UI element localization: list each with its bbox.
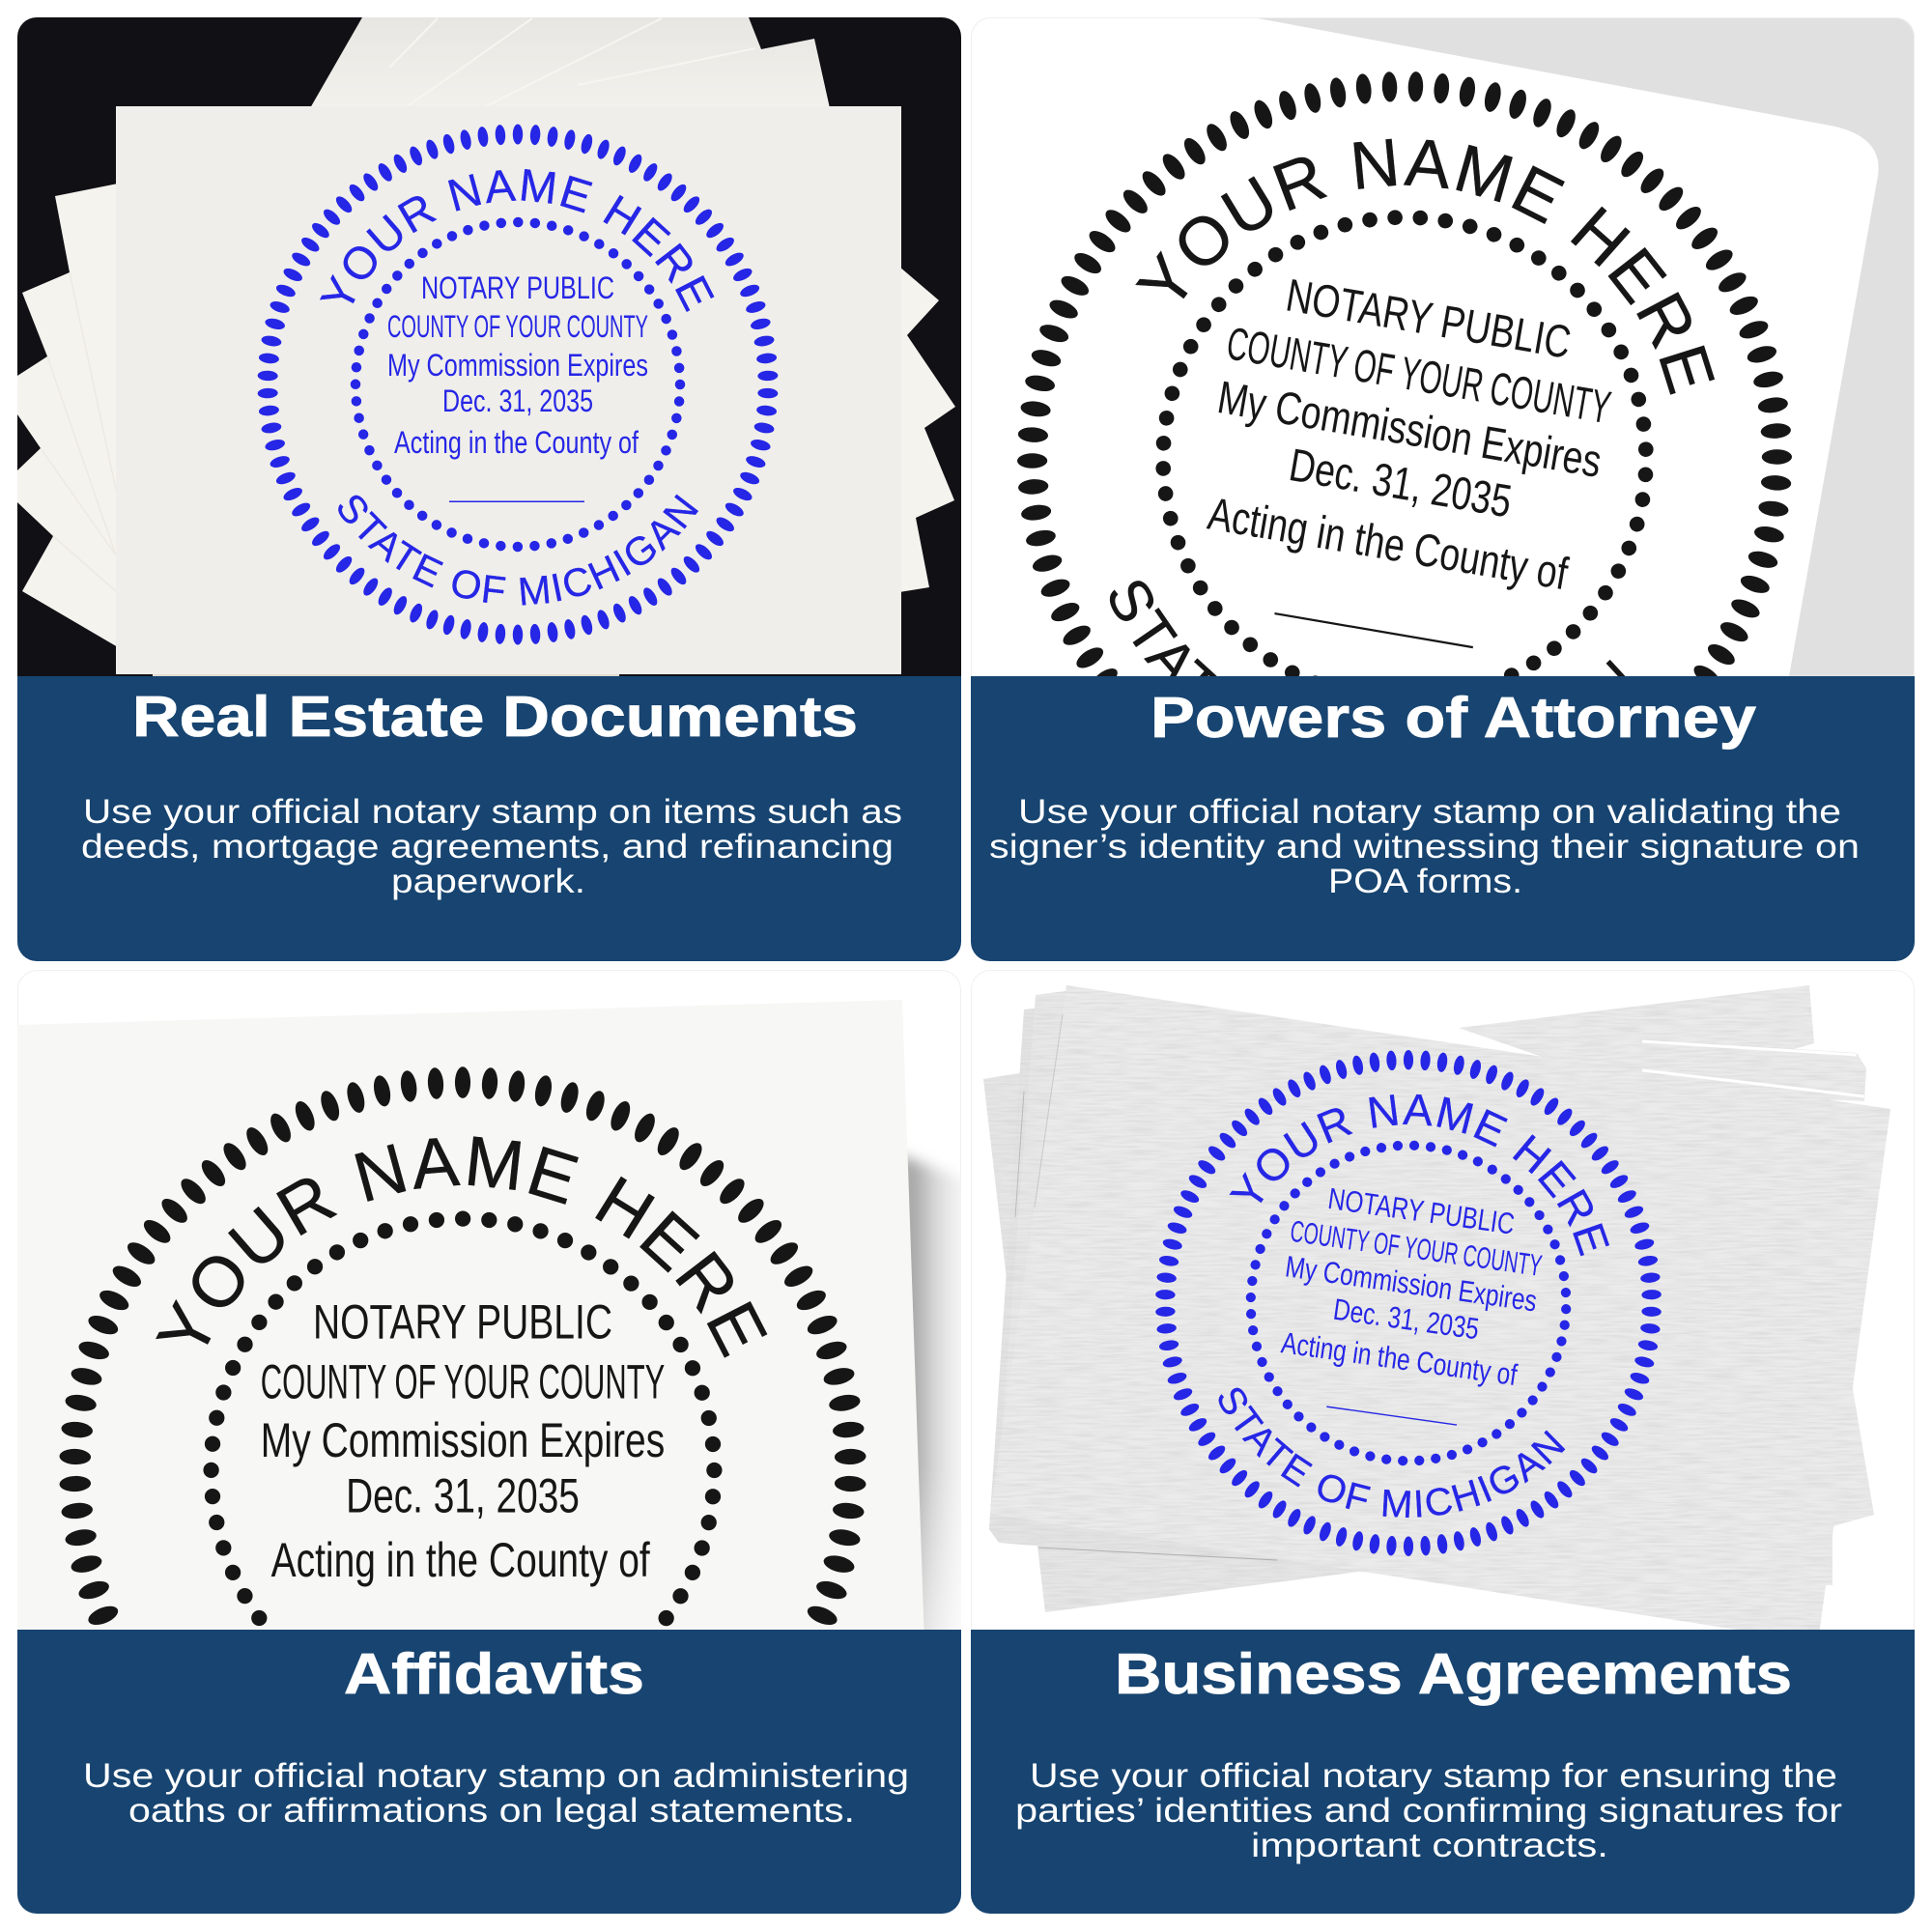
black notary stamp: YOUR NAME HERE bbox=[1135, 139, 1716, 395]
photo background: dark surface bbox=[17, 17, 961, 694]
blue notary stamp: Acting in the County of bbox=[1279, 1325, 1520, 1392]
blue notary stamp bbox=[1155, 1050, 1662, 1556]
description: parties’ identities and confirming signatures for bbox=[1015, 1792, 1842, 1830]
blue notary stamp: COUNTY OF YOUR COUNTY bbox=[1289, 1214, 1544, 1283]
description: important contracts. bbox=[1251, 1827, 1608, 1864]
black notary stamp bbox=[60, 1066, 866, 1627]
description bbox=[1015, 1757, 1842, 1864]
description: oaths or affirmations on legal statements. bbox=[128, 1792, 855, 1830]
black notary stamp bbox=[1017, 71, 1792, 676]
blue notary stamp: STATE OF MICHIGAN bbox=[338, 495, 698, 606]
fanned papers bbox=[17, 17, 955, 678]
description: paperwork. bbox=[391, 863, 585, 900]
description: Use your official notary stamp on items such as bbox=[83, 793, 902, 831]
heading: Business Agreements bbox=[1115, 1642, 1792, 1706]
black notary stamp: NOTARY PUBLIC bbox=[313, 1295, 612, 1350]
description bbox=[990, 798, 1857, 893]
blue notary stamp: YOUR NAME HERE bbox=[1229, 1094, 1609, 1256]
blue notary stamp: My Commission Expires bbox=[387, 348, 648, 383]
blue notary stamp: NOTARY PUBLIC bbox=[421, 270, 614, 305]
blue notary stamp: STATE OF MICHIGAN bbox=[1219, 1387, 1565, 1519]
description: Use your official notary stamp on administering bbox=[83, 1757, 909, 1795]
paper shadow bbox=[908, 1150, 961, 1630]
stacked textured papers bbox=[983, 985, 1890, 1642]
blue notary stamp: NOTARY PUBLIC bbox=[1326, 1181, 1517, 1241]
black notary stamp: Acting in the County of bbox=[271, 1533, 650, 1587]
panel: affidavits bbox=[17, 970, 961, 1914]
black notary stamp: My Commission Expires bbox=[1214, 372, 1605, 488]
photo background: white bbox=[971, 970, 1915, 1646]
panel: powers of attorney bbox=[971, 17, 1915, 961]
white paper card bbox=[971, 17, 1879, 676]
caption band bbox=[971, 1630, 1915, 1914]
paper sheet bbox=[17, 1000, 924, 1642]
heading: Real Estate Documents bbox=[132, 685, 858, 749]
caption band bbox=[17, 1630, 961, 1914]
black notary stamp: NOTARY PUBLIC bbox=[1283, 270, 1575, 369]
blue notary stamp: My Commission Expires bbox=[1283, 1249, 1539, 1319]
blue notary stamp: COUNTY OF YOUR COUNTY bbox=[387, 309, 648, 344]
black notary stamp: COUNTY OF YOUR COUNTY bbox=[261, 1355, 665, 1409]
black notary stamp: Dec. 31, 2035 bbox=[1286, 440, 1515, 527]
description: Use your official notary stamp for ensuring the bbox=[1030, 1757, 1837, 1795]
description: deeds, mortgage agreements, and refinancing bbox=[81, 828, 894, 866]
blue notary stamp: Dec. 31, 2035 bbox=[1331, 1293, 1481, 1346]
photo background: white bbox=[17, 970, 961, 1646]
blue notary stamp: YOUR NAME HERE bbox=[320, 169, 715, 312]
black notary stamp: YOUR NAME HERE bbox=[156, 1136, 767, 1358]
panel: real estate documents bbox=[17, 17, 961, 961]
black notary stamp: Dec. 31, 2035 bbox=[346, 1468, 580, 1522]
caption band bbox=[17, 676, 961, 961]
blue notary stamp: Dec. 31, 2035 bbox=[442, 384, 593, 418]
photo background: grey surface bbox=[1259, 17, 1915, 676]
description bbox=[83, 1757, 909, 1830]
blue notary stamp: Acting in the County of bbox=[394, 425, 639, 460]
caption band bbox=[971, 676, 1915, 961]
black notary stamp: STATE OF MICHIGAN bbox=[1109, 581, 1625, 676]
heading: Powers of Attorney bbox=[1151, 686, 1756, 750]
panel: business agreements bbox=[971, 970, 1915, 1914]
black notary stamp: Acting in the County of bbox=[1205, 489, 1572, 600]
description: Use your official notary stamp on validating the bbox=[1018, 793, 1841, 831]
heading: Affidavits bbox=[344, 1642, 644, 1706]
description: POA forms. bbox=[1328, 863, 1522, 900]
blue notary stamp bbox=[257, 124, 779, 645]
black notary stamp: My Commission Expires bbox=[261, 1413, 665, 1467]
black notary stamp: COUNTY OF YOUR COUNTY bbox=[1223, 318, 1614, 434]
description: signer’s identity and witnessing their signature on bbox=[989, 828, 1860, 866]
main paper card bbox=[116, 106, 901, 674]
description bbox=[81, 793, 902, 900]
